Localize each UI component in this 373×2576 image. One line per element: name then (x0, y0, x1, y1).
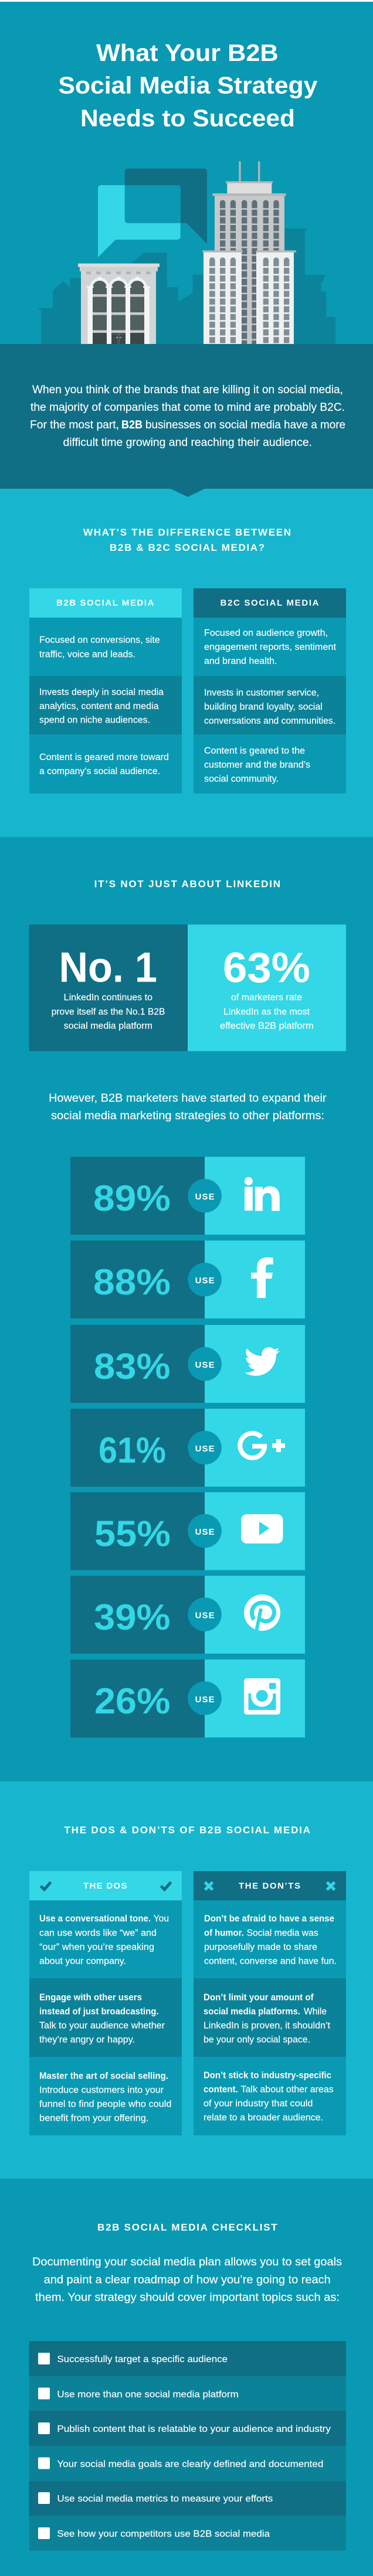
panel: hero (0, 2, 373, 345)
title (58, 39, 318, 131)
row: Google Plus 61% (70, 1409, 305, 1487)
text: platforms intro: However, B2B marketers have started to expand their (49, 1092, 327, 1105)
row: Twitter 83%: 83% (94, 1347, 170, 1387)
item: target audience: Successfully target a specific audience (57, 2354, 228, 2364)
text: dos list (39, 1914, 171, 2124)
illustration: skyline silhouette (39, 229, 335, 344)
text: don'ts list: be your only social space. (204, 2035, 310, 2045)
text: dos list: funnel to find people who could (39, 2100, 171, 2110)
text: don'ts list (204, 1914, 337, 2122)
text: B2B points: Focused on conversions, site (39, 635, 160, 645)
icon: cross left (205, 1882, 212, 1890)
heading: difference: WHAT’S THE DIFFERENCE BETWEEN (83, 527, 292, 538)
text: B2B points: traffic, voice and leads. (39, 649, 135, 660)
text: B2C points: Invests in customer service, (204, 688, 319, 698)
panel: the dos: THE DOS (83, 1881, 128, 1891)
text: intro paragraph: the majority of companies that come to mind are probably B2C. (30, 401, 345, 414)
stat: No. 1: social media platform (64, 1021, 152, 1031)
item: relatable content (29, 2411, 346, 2446)
icon: check right (161, 1882, 171, 1889)
text: dos list: You (154, 1914, 169, 1924)
icon: speech bubble dark (125, 169, 207, 244)
item: more than one platform: Use more than one social media platform (57, 2390, 239, 2400)
row: LinkedIn 89%: USE (195, 1192, 215, 1202)
item: target audience (29, 2341, 346, 2376)
text: B2B points (39, 635, 169, 776)
title: Needs to Succeed (80, 104, 295, 131)
panel: LinkedIn section (0, 837, 373, 1781)
stat: 63%: 63% (223, 945, 310, 991)
item: competitors: See how your competitors use B2B social media (57, 2529, 270, 2539)
text: B2B points: spend on niche audiences. (39, 715, 150, 725)
icon: Twitter (245, 1347, 280, 1376)
row: YouTube 55% (70, 1492, 305, 1570)
panel: B2C column (194, 588, 346, 793)
text: B2C points: social community. (204, 774, 279, 784)
panel: B2B column (29, 588, 182, 793)
stat: 63%: of marketers rate (231, 993, 302, 1003)
text: don'ts list: While (304, 2007, 327, 2017)
icon: speech bubble overlap (125, 185, 181, 223)
text: don'ts list: purposefully made to share (204, 1942, 317, 1953)
text: checklist intro: Documenting your social media plan allows you to set goals (32, 2256, 342, 2268)
row: Facebook 88%: USE (195, 1276, 215, 1286)
heading: difference: B2B & B2C SOCIAL MEDIA? (110, 542, 266, 553)
stat: 63%: effective B2B platform (220, 1021, 314, 1031)
text: dos list: “our” when you’re speaking (39, 1942, 154, 1953)
text: B2C points: Content is geared to the (204, 746, 305, 756)
row: Google Plus 61%: 61% (99, 1430, 166, 1471)
heading: not just LinkedIn: IT’S NOT JUST ABOUT LINKEDIN (94, 878, 282, 890)
text: B2C points: engagement reports, sentiment (204, 642, 337, 652)
row: Google Plus 61%: USE (195, 1444, 215, 1454)
stat: No. 1: No. 1 (59, 945, 157, 991)
illustration: tower left wing (202, 250, 243, 344)
text: B2C points: building brand loyalty, social (204, 702, 323, 712)
text: dos list: Use a conversational tone. (39, 1914, 151, 1924)
icon: speech bubble light (98, 185, 181, 257)
icon: Google Plus (240, 1433, 285, 1458)
text: intro paragraph: When you think of the brands that are killing it on social media, (32, 384, 343, 396)
panel: difference section (0, 489, 373, 837)
text: intro paragraph: businesses on social media have a more (145, 419, 345, 431)
text: don'ts list: Don’t limit your amount of (204, 1993, 314, 2003)
text: dos list: benefit from your offering. (39, 2114, 149, 2124)
row: LinkedIn 89%: 89% (93, 1178, 171, 1219)
item: metrics: Use social media metrics to measure your efforts (57, 2494, 273, 2504)
stat: No. 1 (29, 925, 188, 1051)
icon: check left (41, 1882, 50, 1889)
text: platforms intro: social media marketing strategies to other platforms: (51, 1110, 324, 1122)
item: competitors (29, 2516, 346, 2551)
text: don'ts list: of your industry that could (204, 2098, 313, 2108)
icon: Pinterest (244, 1594, 280, 1631)
text: don'ts list: Talk about other areas (240, 2084, 334, 2094)
illustration: low arched building (78, 264, 160, 344)
row: LinkedIn 89% (70, 1157, 305, 1235)
text: B2B points: Content is geared more toward (39, 752, 169, 762)
row: Instagram 26%: 26% (94, 1681, 170, 1722)
panel: intro band (0, 344, 373, 497)
text: dos list: can use words like “we” and (39, 1928, 157, 1938)
panel: dos and don'ts section (0, 1781, 373, 2179)
text: B2B points: Invests deeply in social media (39, 687, 164, 697)
row: YouTube 55%: USE (195, 1527, 215, 1537)
text: intro paragraph: For the most part, (30, 419, 119, 431)
text: checklist intro: and paint a clear roadmap of how you’re going to reach (44, 2274, 331, 2287)
text: dos list: about your company. (39, 1956, 126, 1967)
item: goals documented (29, 2446, 346, 2481)
text: dos list: Engage with other users (39, 1993, 142, 2003)
text: B2C points (204, 628, 337, 784)
stat: No. 1: prove itself as the No.1 B2B (52, 1007, 165, 1017)
row: Pinterest 39%: USE (195, 1610, 215, 1621)
stat: 63% (188, 925, 346, 1051)
item: relatable content: Publish content that is relatable to your audience and industry (57, 2424, 331, 2434)
panel: the don'ts: THE DON’TS (239, 1881, 301, 1891)
illustration: tower right wing (256, 250, 296, 344)
row: YouTube 55%: 55% (94, 1514, 171, 1554)
item: goals documented: Your social media goals are clearly defined and documented (57, 2459, 323, 2469)
text: don'ts list: relate to a broader audience. (204, 2113, 323, 2122)
item: more than one platform (29, 2376, 346, 2411)
row: Facebook 88% (70, 1241, 305, 1318)
text: intro paragraph (30, 384, 345, 449)
stat: 63%: LinkedIn as the most (223, 1007, 310, 1017)
text: platforms intro (49, 1092, 327, 1122)
panel: B2B column: B2B SOCIAL MEDIA (56, 598, 155, 608)
text: dos list: they’re angry or happy. (39, 2035, 135, 2045)
text: intro paragraph: B2B (121, 419, 143, 431)
text: dos list: Master the art of social selling. (39, 2071, 168, 2081)
text: dos list: Talk to your audience whether (39, 2020, 165, 2031)
panel: the dos (29, 1871, 182, 2135)
text: don'ts list: LinkedIn is proven, it shouldn’t (204, 2020, 331, 2031)
text: B2B points: analytics, content and media (39, 701, 159, 711)
heading: checklist: B2B SOCIAL MEDIA CHECKLIST (97, 2221, 279, 2233)
text: don'ts list: content, converse and have fun. (204, 1956, 337, 1967)
text: B2C points: conversations and communities. (204, 716, 335, 726)
text: don'ts list: Social media was (247, 1928, 318, 1938)
icon: Instagram (244, 1678, 280, 1715)
panel: checklist section (0, 2179, 373, 2576)
row: Twitter 83%: USE (195, 1360, 215, 1370)
text: don'ts list: Don’t stick to industry-specific (204, 2070, 331, 2080)
text: B2C points: and brand health. (204, 656, 277, 666)
row: Instagram 26% (70, 1660, 305, 1737)
title: Social Media Strategy (58, 71, 318, 98)
item: metrics (29, 2481, 346, 2516)
row: Twitter 83% (70, 1325, 305, 1403)
row: Pinterest 39% (70, 1576, 305, 1654)
icon: cross right (327, 1882, 334, 1890)
icon: LinkedIn (245, 1177, 280, 1211)
text: don'ts list: Don’t be afraid to have a sense (204, 1914, 334, 1924)
title: What Your B2B (96, 39, 279, 66)
panel: B2C column: B2C SOCIAL MEDIA (221, 598, 320, 608)
text: dos list: instead of just broadcasting. (39, 2007, 158, 2017)
row: Facebook 88%: 88% (93, 1262, 171, 1303)
text: checklist intro: them. Your strategy should cover important topics such as: (35, 2292, 340, 2304)
icon: YouTube (241, 1514, 283, 1543)
stat: No. 1: LinkedIn continues to (64, 993, 152, 1003)
row: Instagram 26%: USE (195, 1695, 215, 1705)
text: B2B points: a company’s social audience. (39, 766, 160, 776)
text: B2C points: customer and the brand’s (204, 760, 310, 770)
text: don'ts list: content. (204, 2084, 238, 2094)
heading: difference (83, 527, 292, 553)
row: Pinterest 39%: 39% (94, 1597, 170, 1638)
text: intro paragraph: difficult time growing and reaching their audience. (63, 437, 312, 449)
text: B2C points: Focused on audience growth, (204, 628, 328, 638)
panel: the don'ts (194, 1871, 346, 2135)
text: don'ts list: social media platforms. (204, 2007, 300, 2017)
illustration: office tower (202, 161, 296, 345)
text: checklist intro (32, 2256, 342, 2304)
icon: Facebook (251, 1258, 273, 1298)
text: don'ts list: of humor. (204, 1928, 244, 1938)
text: dos list: Introduce customers into your (39, 2086, 164, 2095)
heading: dos and don'ts: THE DOS & DON’TS OF B2B SOCIAL MEDIA (65, 1825, 311, 1835)
